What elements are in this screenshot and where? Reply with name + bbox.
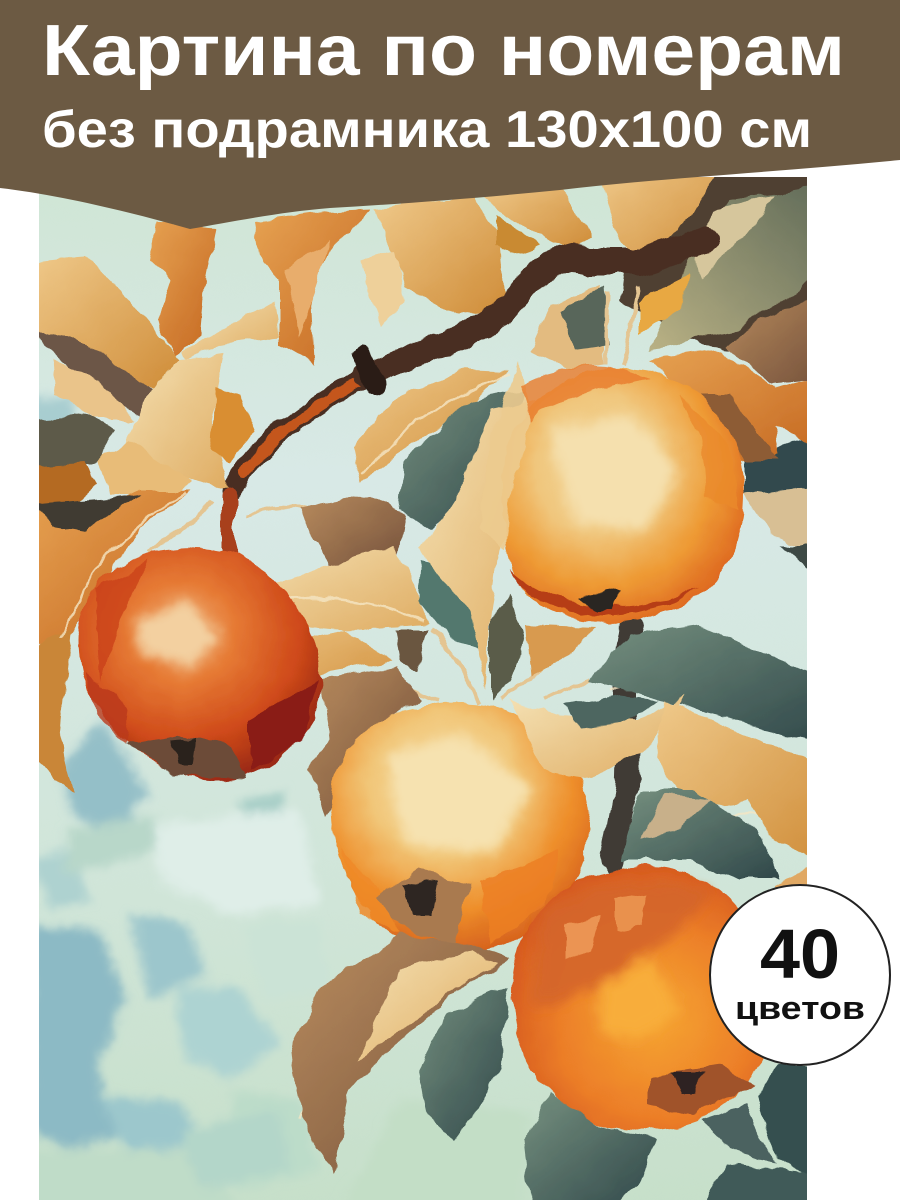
leaf veins [60,375,807,1120]
left leaf cluster [30,256,280,795]
subtitle: без подрамника 130х100 см [42,101,812,159]
badge: 40 colours [710,885,890,1065]
header banner [0,0,900,229]
badge: 40 colours: цветов [735,990,865,1026]
back leaves upper right [602,177,807,569]
central leaf group [276,367,596,817]
right leaf cluster [510,624,807,888]
top centre leaves [150,185,610,370]
branch [229,240,705,860]
apple: centre [330,702,590,955]
apple: bottom right [512,865,772,1130]
painting sky background [20,160,830,1200]
badge: 40 colours: 40 [760,915,840,993]
title: Картина по номерам [42,11,845,91]
sky cloud patches [39,392,480,1200]
bottom leaves [292,935,830,1200]
apple: left red [78,548,325,780]
painting: apples on a branch [20,160,830,1200]
thin stems [150,285,640,702]
apple: top right [480,360,745,622]
